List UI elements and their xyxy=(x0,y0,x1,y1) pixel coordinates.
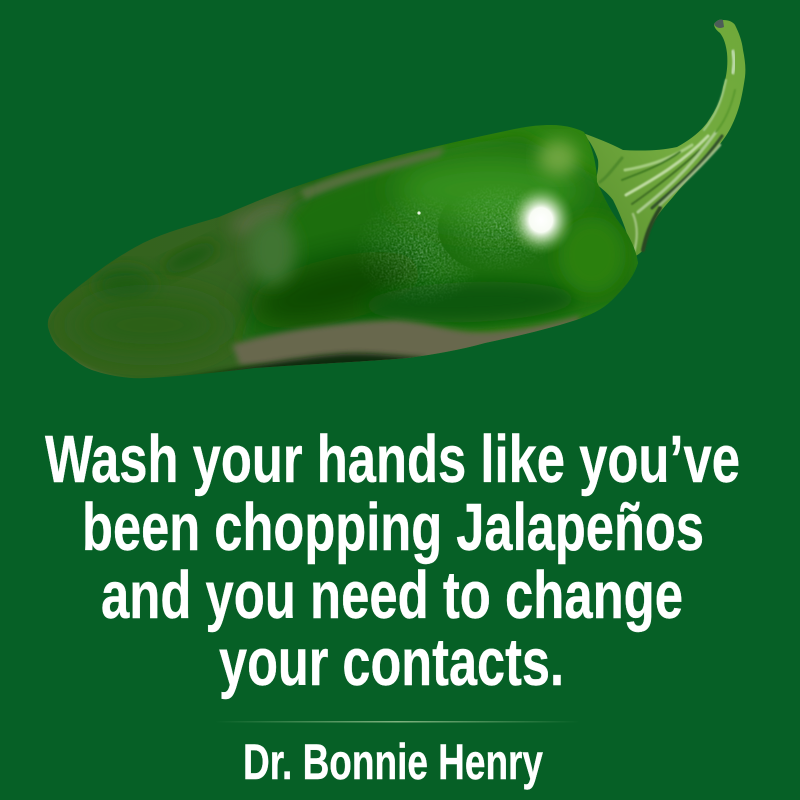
attribution: Dr. Bonnie Henry xyxy=(243,734,543,790)
speckled sheen on pepper xyxy=(360,188,544,300)
small glint xyxy=(417,211,421,215)
quote text: your contacts. xyxy=(219,625,564,700)
shine highlight xyxy=(508,185,574,255)
jalapeño pepper xyxy=(35,20,745,392)
pepper body xyxy=(48,125,638,378)
quote text xyxy=(45,422,740,700)
pepper stem and calyx xyxy=(583,20,745,258)
